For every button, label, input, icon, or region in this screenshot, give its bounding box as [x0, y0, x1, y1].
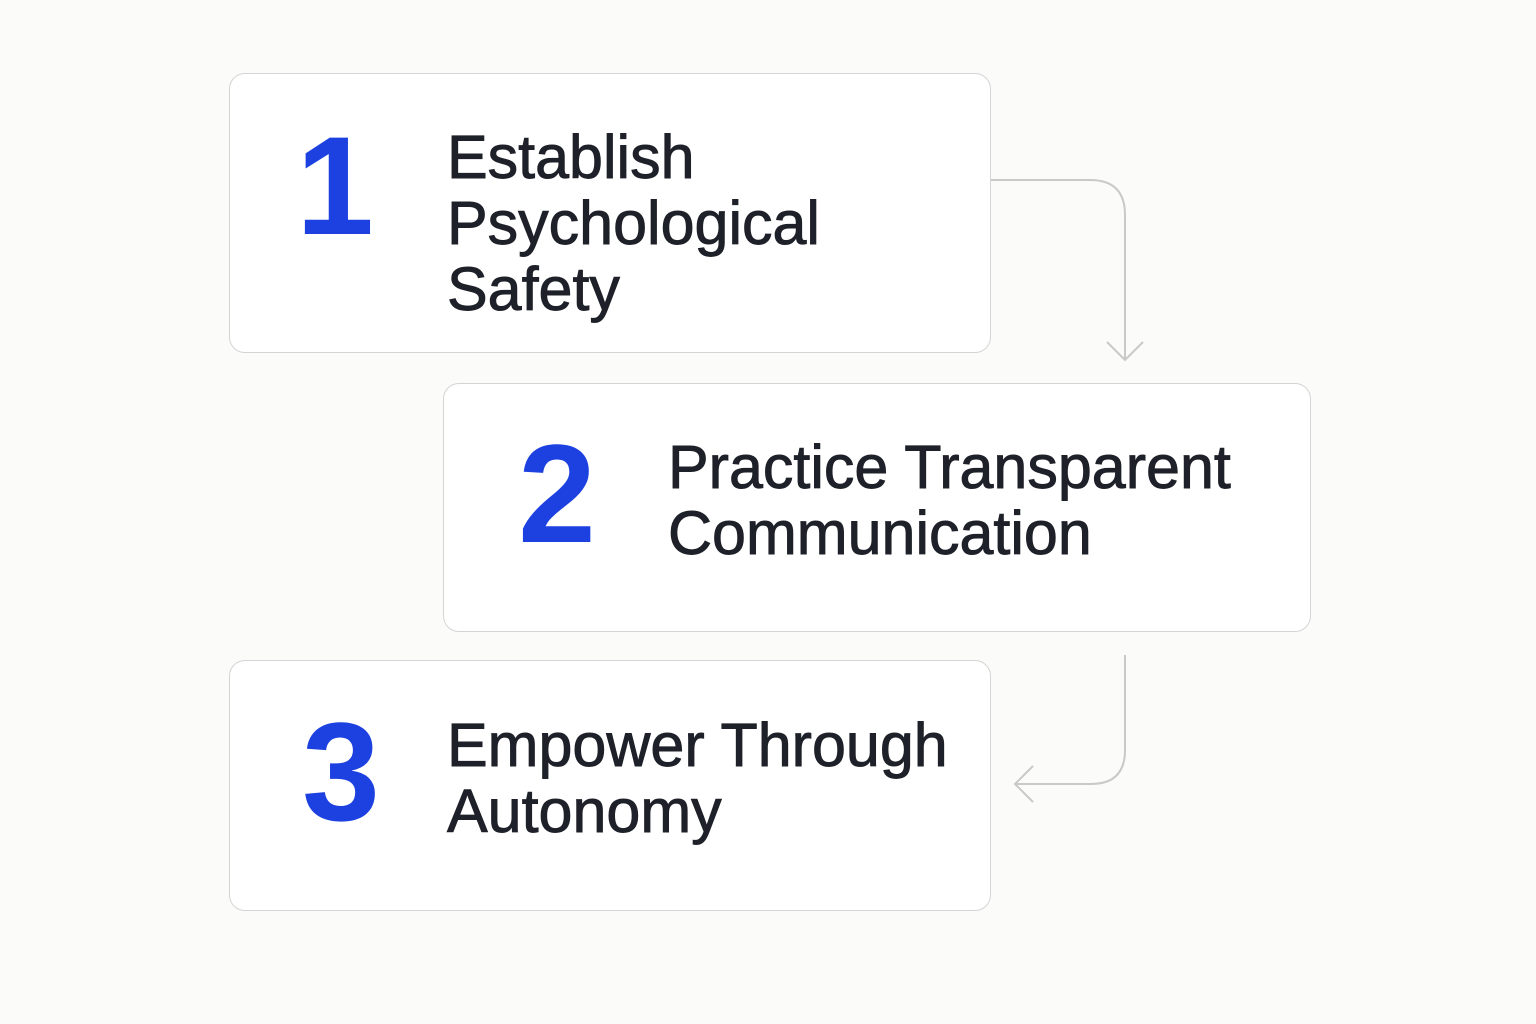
- arrow: step 1 to step 2: [990, 180, 1143, 360]
- text: Practice Transparent Communication: Practice Transparent: [668, 433, 1231, 501]
- arrow: step 2 to step 3: [1015, 655, 1125, 802]
- number 2: 2: [518, 415, 596, 572]
- text: Empower Through Autonomy: Autonomy: [447, 777, 722, 845]
- text: Practice Transparent Communication: Communication: [668, 499, 1092, 567]
- text: Empower Through Autonomy: [446, 711, 948, 845]
- text: Establish Psychological Safety: [447, 123, 820, 323]
- text: Practice Transparent Communication: [668, 433, 1231, 567]
- panel: step 1: [229, 73, 991, 353]
- text: Empower Through Autonomy: Empower Through: [447, 711, 948, 779]
- text: Establish Psychological Safety: Safety: [447, 255, 620, 323]
- number 1: 1: [296, 107, 374, 264]
- number 3: 3: [302, 693, 380, 850]
- text: Establish Psychological Safety: Psychological: [447, 189, 820, 257]
- panel: step 3: [229, 660, 991, 911]
- text: Establish Psychological Safety: Establish: [447, 123, 695, 191]
- panel: step 2: [443, 383, 1311, 632]
